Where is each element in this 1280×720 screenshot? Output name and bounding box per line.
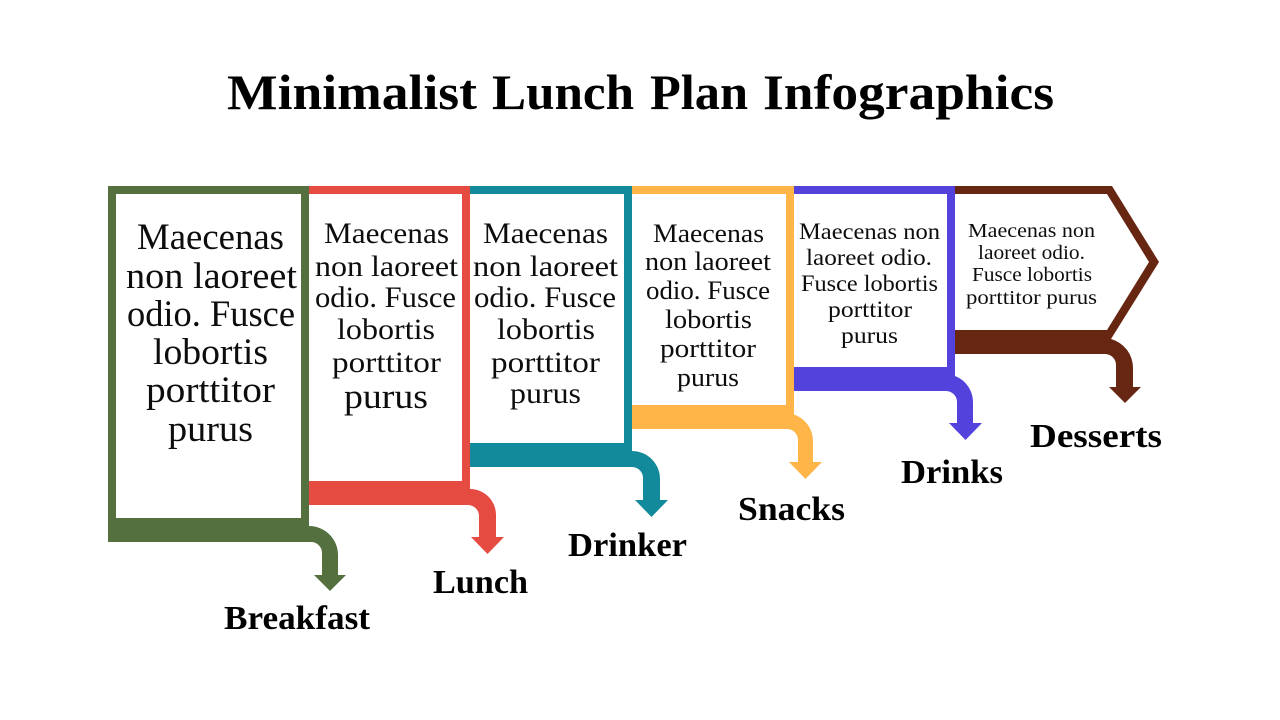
title: Plan [650,64,748,120]
panel: lunch [301,186,528,601]
lunch body text: porttitor [332,346,441,379]
snacks body text [645,218,772,392]
drinks body text: porttitor [828,297,912,322]
drinker body text: purus [510,377,581,410]
lunch body text: odio. Fusce [315,281,456,314]
panel: drinks [786,186,1003,491]
drinks body text: Maecenas non [799,219,941,244]
drinks body text: Fusce lobortis [801,271,938,296]
breakfast body text: purus [168,409,253,450]
snacks body text: porttitor [660,333,756,363]
drinker body text: odio. Fusce [474,281,616,314]
lunch body text [315,217,459,416]
panel: breakfast [108,186,371,637]
title: Lunch [492,64,634,120]
snacks body text: Maecenas [653,218,764,248]
title: Minimalist [227,64,477,120]
snacks body text: odio. Fusce [646,275,770,305]
snacks body text: lobortis [665,304,752,334]
title [227,64,1054,120]
panel: snacks [624,186,845,528]
desserts arrow frame [947,186,1159,403]
drinker label: Drinker [568,527,687,564]
lunch body text: purus [344,377,428,416]
breakfast body text: porttitor [146,370,275,411]
breakfast label: Breakfast [224,600,371,637]
drinker body text: Maecenas [483,217,608,250]
panel: drinker [462,186,687,564]
drinker arrow frame [462,186,668,517]
breakfast body text: lobortis [153,332,268,373]
lunch arrow frame [301,186,504,554]
desserts label: Desserts [1030,418,1162,455]
breakfast body text: non laoreet [126,256,298,297]
lunch body text: non laoreet [315,250,459,283]
drinker body text: non laoreet [473,250,619,283]
desserts body text: Fusce lobortis [972,265,1092,286]
snacks arrow frame [624,186,822,479]
lunch label: Lunch [433,564,528,601]
desserts body text: Maecenas non [968,221,1095,242]
breakfast arrow frame [108,186,346,591]
title: Infographics [763,64,1054,120]
snacks body text: non laoreet [645,246,772,276]
snacks label: Snacks [738,491,845,528]
desserts body text [966,221,1097,309]
drinks arrow frame [786,186,982,440]
lunch body text: lobortis [337,313,435,346]
panel: desserts [947,186,1162,455]
drinks label: Drinks [901,454,1003,491]
desserts body text: laoreet odio. [978,243,1085,264]
breakfast body text: Maecenas [137,217,284,258]
desserts body text: porttitor purus [966,288,1097,309]
breakfast body text [126,217,298,450]
drinks body text [799,219,941,348]
drinks body text: purus [841,323,898,348]
drinker body text [473,217,619,410]
drinker body text: lobortis [497,313,595,346]
breakfast body text: odio. Fusce [127,294,295,335]
drinks body text: laoreet odio. [806,245,932,270]
snacks body text: purus [677,362,739,392]
lunch body text: Maecenas [324,217,449,250]
drinker body text: porttitor [491,346,600,379]
